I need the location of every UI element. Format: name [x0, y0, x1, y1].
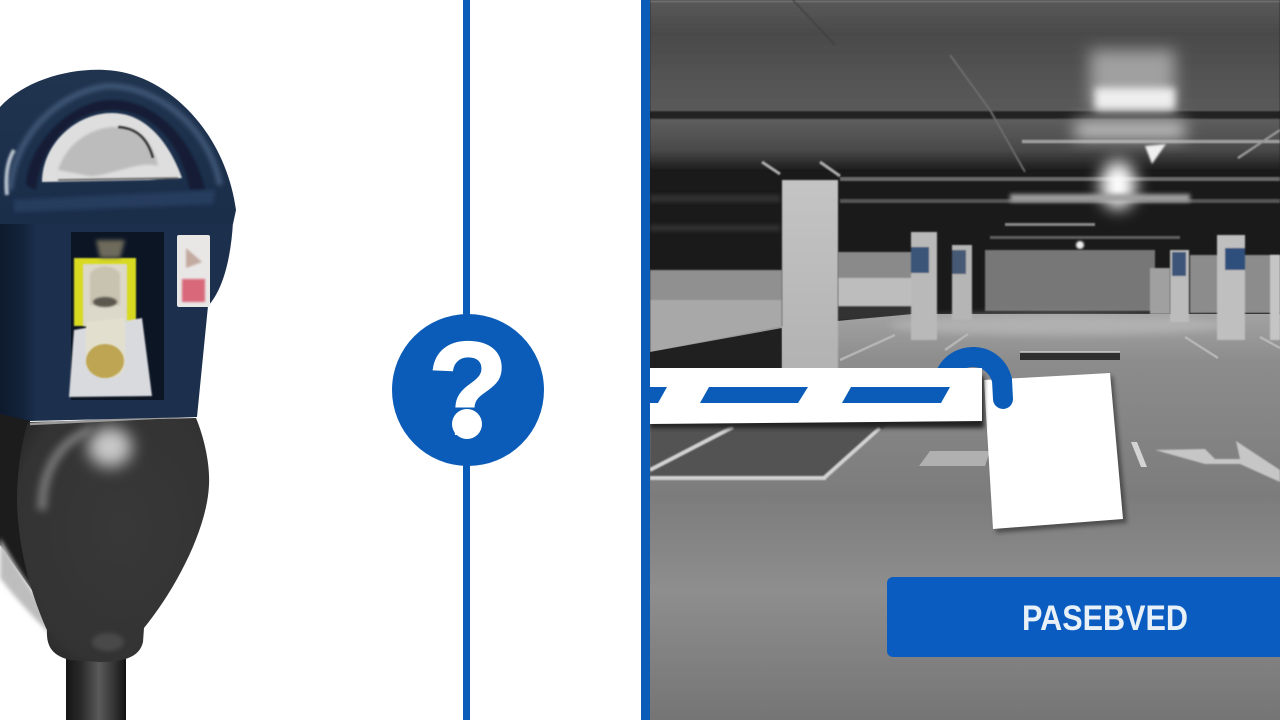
- panel base: [650, 0, 1280, 352]
- divider line: [463, 0, 470, 720]
- back wall: [650, 250, 1280, 355]
- meter display: [42, 113, 182, 182]
- yellow coin holder: [74, 258, 136, 326]
- question mark: ?: [428, 315, 508, 462]
- barrier arm: [650, 368, 984, 428]
- ceiling light glare: [1010, 50, 1190, 249]
- panel border: [641, 0, 650, 720]
- sticker: [177, 235, 210, 307]
- question mark dot: [452, 409, 482, 439]
- hanging sign shadow: [987, 376, 1127, 533]
- meter head dome: [0, 70, 236, 224]
- hook: [945, 357, 1003, 399]
- panel: parking garage: [650, 0, 1280, 720]
- meter pole: [66, 655, 126, 720]
- barrier stripes: [650, 387, 667, 403]
- banner label: PASEBVED: [1022, 599, 1188, 638]
- status banner: [887, 577, 1280, 657]
- main pillar: [782, 180, 838, 370]
- icon: parking meter: [0, 70, 236, 720]
- icon: question mark badge: [392, 314, 544, 466]
- coin tray: [69, 318, 152, 397]
- pillars: [762, 162, 1280, 370]
- garage ceiling: [650, 0, 1280, 239]
- garage floor: [650, 314, 1280, 720]
- meter lower bulb: [0, 412, 209, 662]
- coin slot recess: [71, 232, 164, 400]
- meter body: [0, 222, 233, 421]
- blank white sign: [984, 373, 1123, 529]
